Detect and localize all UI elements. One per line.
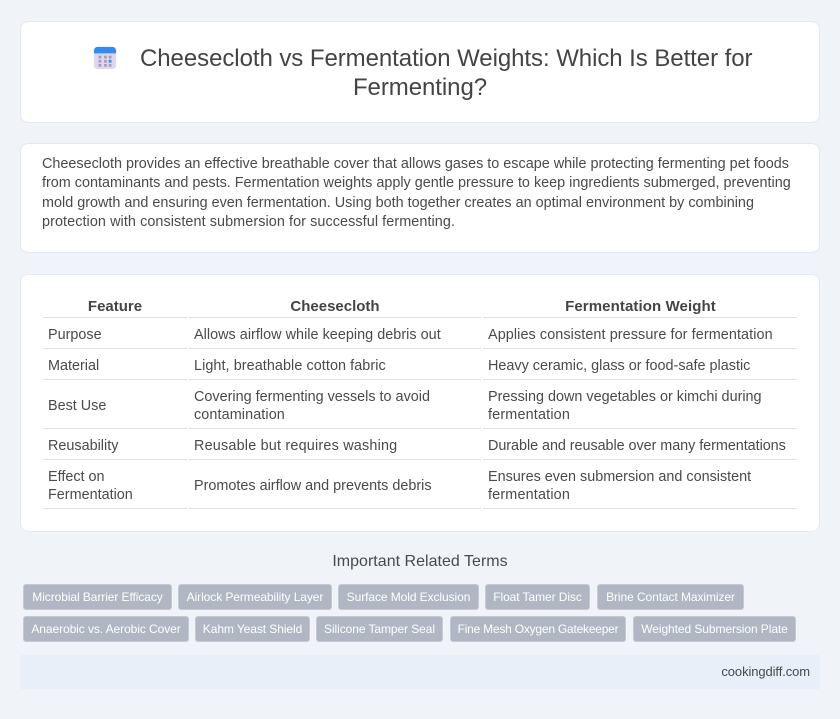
row: purpose: Purpose — [48, 327, 102, 343]
table header row: Fermentation Weight — [565, 298, 716, 315]
row: best use: fermentation — [488, 407, 570, 423]
summary paragraph: from contaminants and pests. Fermentation weights apply gentle pressure to keep ingredients submerged, preventing — [42, 175, 791, 191]
icon: calendar — [94, 46, 116, 70]
row: effect on fermentation — [48, 469, 752, 503]
row: effect on fermentation: Fermentation — [48, 487, 133, 503]
title: Cheesecloth vs Fermentation Weights: Which Is Better for — [140, 45, 752, 72]
row: best use: Pressing down vegetables or kimchi during — [488, 389, 762, 405]
title: Fermenting? — [353, 74, 487, 101]
panel: summary text — [20, 143, 820, 253]
tags: related terms: Kahm Yeast Shield — [203, 622, 302, 636]
panel: title header — [20, 21, 820, 123]
row: reusability: Reusability — [48, 438, 118, 454]
tags: related terms: Surface Mold Exclusion — [347, 590, 470, 604]
tags: related terms: Float Tamer Disc — [493, 590, 582, 604]
row: purpose — [48, 327, 773, 343]
tags: related terms: Weighted Submersion Plate — [641, 622, 788, 636]
tags: related terms — [23, 584, 796, 642]
tags: related terms: Airlock Permeability Layer — [187, 590, 323, 604]
table header row: Cheesecloth — [290, 298, 380, 315]
row: reusability: Reusable but requires washing — [194, 438, 397, 454]
row: effect on fermentation: Promotes airflow and prevents debris — [194, 478, 432, 494]
row: best use — [48, 389, 762, 423]
row: reusability — [48, 438, 786, 454]
title — [140, 45, 752, 101]
row: material: Light, breathable cotton fabric — [194, 358, 386, 374]
row: best use: Covering fermenting vessels to avoid — [194, 389, 430, 405]
row: purpose: Applies consistent pressure for fermentation — [488, 327, 773, 343]
row: reusability: Durable and reusable over many fermentations — [488, 438, 786, 454]
table header row — [88, 298, 716, 315]
tags: related terms: Anaerobic vs. Aerobic Cover — [31, 622, 181, 636]
row: material: Heavy ceramic, glass or food-safe plastic — [488, 358, 750, 374]
panel: comparison table — [20, 274, 820, 532]
row: material: Material — [48, 358, 99, 374]
heading: related terms: Important Related Terms — [332, 553, 508, 570]
tags: related terms: Silicone Tamper Seal — [324, 622, 435, 636]
row: best use: contamination — [194, 407, 285, 423]
row: effect on fermentation: fermentation — [488, 487, 570, 503]
summary paragraph — [42, 156, 791, 230]
row: best use: Best Use — [48, 398, 106, 414]
summary paragraph: Cheesecloth provides an effective breathable cover that allows gases to escape while protecting fermenting pet foods — [42, 156, 789, 172]
table header row: Feature — [88, 298, 142, 315]
footer source label: cookingdiff.com — [721, 664, 810, 679]
row: effect on fermentation: Ensures even submersion and consistent — [488, 469, 751, 485]
row: effect on fermentation: Effect on — [48, 469, 105, 485]
row: purpose: Allows airflow while keeping debris out — [194, 327, 441, 343]
summary paragraph: protection with consistent submersion for successful fermenting. — [42, 214, 455, 230]
row: material — [48, 358, 750, 374]
tags: related terms: Microbial Barrier Efficacy — [32, 590, 163, 604]
tags: related terms: Fine Mesh Oxygen Gatekeeper — [458, 622, 618, 636]
footer band — [20, 655, 820, 689]
tags: related terms: Brine Contact Maximizer — [606, 590, 735, 604]
summary paragraph: mold growth and ensuring even fermentation. Using both together creates an optimal environment by combining — [42, 195, 754, 211]
